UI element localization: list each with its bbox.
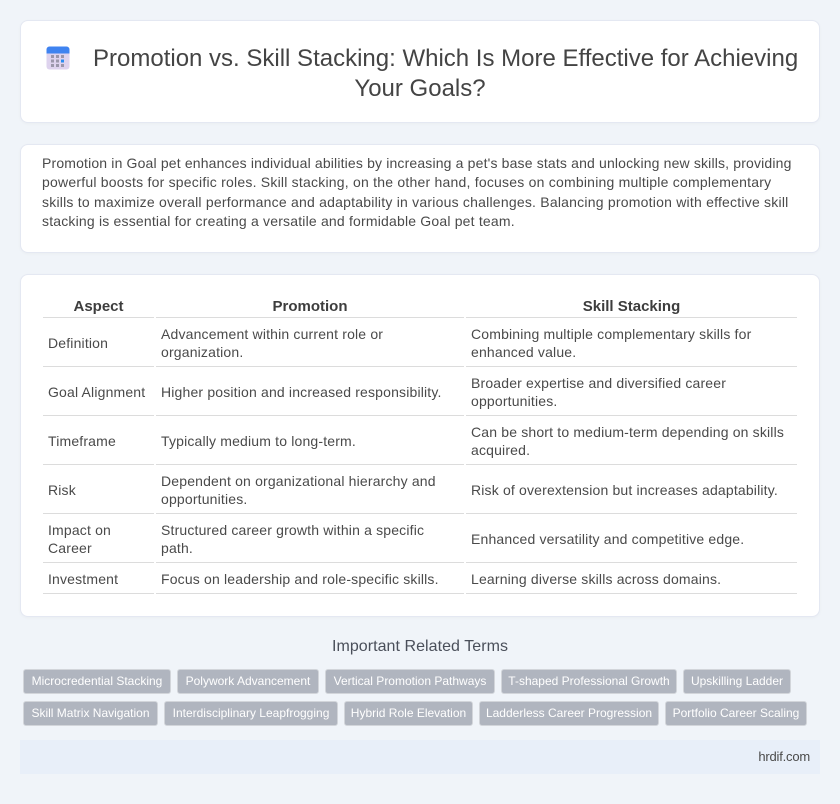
column headers: Skill Stacking: [583, 298, 680, 315]
row: impact on career: [48, 522, 744, 556]
comparison table panel: [20, 274, 820, 617]
tag: [177, 669, 319, 694]
row: impact on career: Career: [48, 540, 92, 556]
row: goal alignment: Goal Alignment: [48, 384, 145, 400]
row: risk: Dependent on organizational hierarchy and: [161, 473, 436, 489]
tag: Polywork Advancement: [186, 674, 310, 688]
row: goal alignment: opportunities.: [471, 393, 557, 409]
title: Promotion vs. Skill Stacking: Which Is More Effective for Achieving: [93, 45, 798, 72]
row: goal alignment: [48, 375, 726, 409]
title: Your Goals?: [354, 75, 486, 102]
related terms tags: [23, 669, 807, 726]
row: definition: [48, 326, 752, 360]
footer bar: [20, 740, 820, 774]
column headers: [73, 298, 680, 315]
column headers: Aspect: [73, 298, 124, 315]
intro paragraph: stacking is essential for creating a versatile and formidable Goal pet team.: [42, 213, 515, 229]
related terms heading: Important Related Terms: [332, 638, 508, 655]
intro paragraph: Promotion in Goal pet enhances individual abilities by increasing a pet's base stats and unlocking new skills, providing: [42, 155, 792, 171]
tag: Skill Matrix Navigation: [31, 706, 150, 720]
row: timeframe: acquired.: [471, 442, 530, 458]
row: impact on career: Structured career growth within a specific: [161, 522, 424, 538]
intro paragraph: skills to maximize overall performance and adaptability in various challenges. Balancing promotion with effective skill: [42, 194, 788, 210]
row: timeframe: Can be short to medium-term depending on skills: [471, 424, 784, 440]
tag: Ladderless Career Progression: [486, 706, 652, 720]
tag: [683, 669, 791, 694]
column headers: Promotion: [272, 298, 348, 315]
title: [93, 45, 798, 102]
row: impact on career: path.: [161, 540, 193, 556]
tag: Interdisciplinary Leapfrogging: [173, 706, 329, 720]
tag: Microcredential Stacking: [32, 674, 162, 688]
row: definition: Combining multiple complementary skills for: [471, 326, 751, 342]
row: impact on career: Enhanced versatility and competitive edge.: [471, 531, 744, 547]
tag: [344, 701, 473, 726]
tag: Upskilling Ladder: [691, 674, 783, 688]
row: goal alignment: Broader expertise and diversified career: [471, 375, 726, 391]
row: investment: Learning diverse skills across domains.: [471, 571, 721, 587]
tag: [665, 701, 807, 726]
tag: [325, 669, 495, 694]
row: risk: Risk: [48, 482, 76, 498]
row: goal alignment: Higher position and increased responsibility.: [161, 384, 442, 400]
intro paragraph: powerful boosts for specific roles. Skill stacking, on the other hand, focuses on combining multiple complementary: [42, 174, 771, 190]
icon: calendar: [46, 46, 70, 70]
tag: Hybrid Role Elevation: [351, 706, 466, 720]
row: investment: Investment: [48, 571, 118, 587]
tag: [501, 669, 677, 694]
tag: [164, 701, 338, 726]
comparison table: [43, 298, 797, 594]
tag: Vertical Promotion Pathways: [334, 674, 486, 688]
footer source: hrdif.com: [758, 749, 810, 764]
tag: [23, 669, 171, 694]
intro paragraph: [42, 155, 792, 229]
row: impact on career: Impact on: [48, 522, 111, 538]
row: risk: opportunities.: [161, 491, 247, 507]
row: investment: [48, 571, 721, 587]
row: definition: Definition: [48, 335, 108, 351]
row: definition: Advancement within current role or: [161, 326, 383, 342]
tag: Portfolio Career Scaling: [673, 706, 799, 720]
row: risk: [48, 473, 778, 507]
tag: [479, 701, 659, 726]
row: timeframe: [48, 424, 784, 458]
tag: [23, 701, 158, 726]
header panel: [20, 20, 820, 123]
tag: T-shaped Professional Growth: [508, 674, 670, 688]
row: timeframe: Timeframe: [48, 433, 116, 449]
row: definition: organization.: [161, 344, 243, 360]
row: investment: Focus on leadership and role-specific skills.: [161, 571, 439, 587]
row: risk: Risk of overextension but increases adaptability.: [471, 482, 778, 498]
row: definition: enhanced value.: [471, 344, 576, 360]
intro text panel: [20, 144, 820, 253]
row: timeframe: Typically medium to long-term.: [161, 433, 356, 449]
